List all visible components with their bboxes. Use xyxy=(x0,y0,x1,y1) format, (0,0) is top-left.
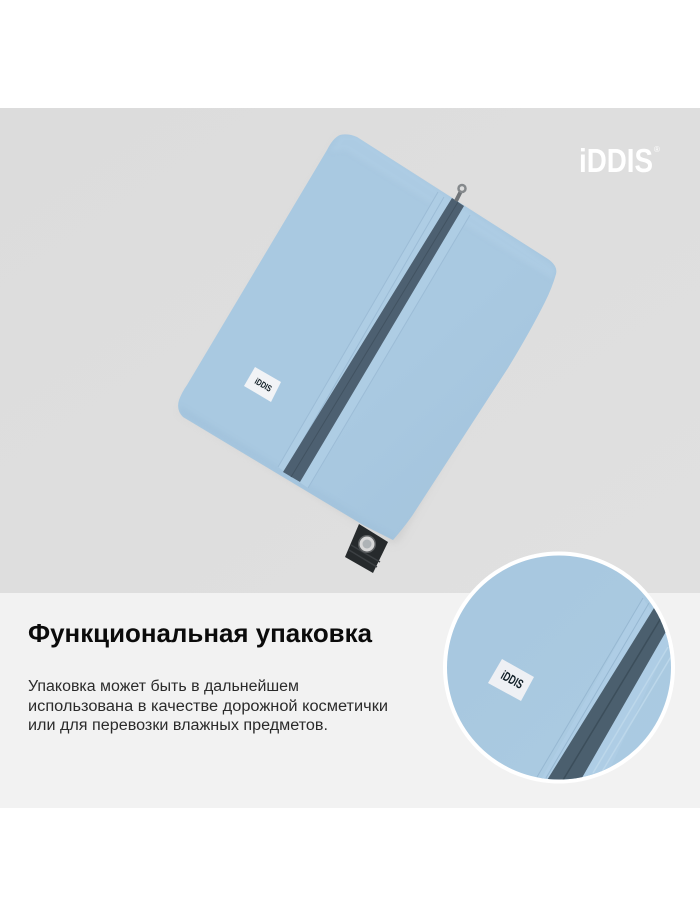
zoom detail circle xyxy=(443,552,675,790)
body text xyxy=(28,678,388,734)
pouch shadow xyxy=(180,137,552,544)
body text: Упаковка может быть в дальнейшем xyxy=(28,678,299,695)
sewn logo label xyxy=(244,367,281,402)
sewn logo label in circle: iDDIS xyxy=(499,668,526,692)
pouch body xyxy=(178,134,556,540)
sewn logo label in circle xyxy=(488,659,534,701)
logo: iddis: iDDIS xyxy=(579,142,653,179)
product photo: blue pouch xyxy=(178,134,556,573)
heading: Функциональная упаковка xyxy=(28,618,373,648)
zipper pull xyxy=(456,185,466,201)
sewn logo label: iDDIS xyxy=(253,376,274,394)
body text: использована в качестве дорожной косметички xyxy=(28,698,388,715)
bottom text panel background xyxy=(0,593,700,808)
zipper flap strip in circle xyxy=(542,634,668,780)
photo background xyxy=(0,108,700,593)
zipper tape xyxy=(283,198,464,482)
hanging tag with grommet xyxy=(345,524,388,573)
body text: или для перевозки влажных предметов. xyxy=(28,717,328,734)
zipper tape in circle xyxy=(548,608,666,780)
logo: iddis: ® xyxy=(654,145,660,154)
zipper flap strip xyxy=(278,192,470,488)
